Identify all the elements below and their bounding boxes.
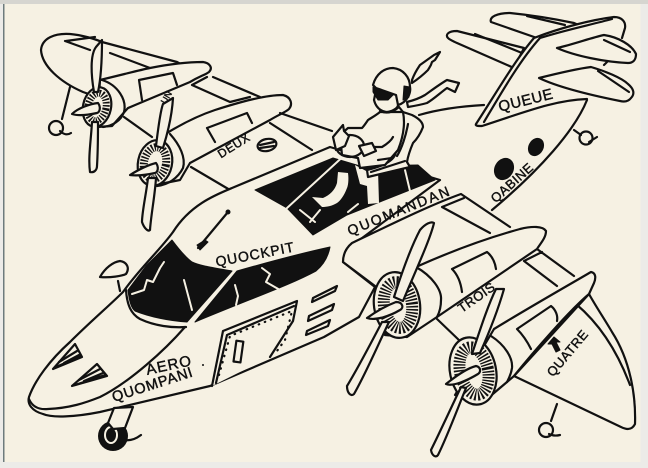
fuselage body (29, 147, 440, 416)
outer wing panel (524, 249, 574, 286)
fin (476, 17, 625, 126)
label QUATRE: QUATRE (544, 327, 591, 379)
propeller one (92, 40, 102, 92)
cockpit floor (255, 158, 435, 235)
engine front four (443, 333, 503, 409)
pitot line (197, 210, 230, 250)
wing surface (343, 194, 510, 290)
stick (287, 152, 348, 208)
left front wing with engine two (130, 95, 332, 231)
nacelle one (97, 62, 211, 127)
scarves (412, 52, 440, 83)
label CABINE: QABINE (488, 160, 536, 206)
nose inner line (29, 327, 185, 409)
side vents (306, 286, 337, 335)
right wing with engine three (347, 222, 574, 395)
portholes (491, 155, 517, 183)
label UN: UN (159, 89, 174, 106)
nose window frame (126, 290, 186, 327)
label DEUX: DEUX (215, 130, 253, 161)
propeller two (156, 98, 173, 148)
fuselage (29, 147, 440, 416)
ear flap (403, 86, 410, 100)
Q float tail (574, 130, 581, 135)
goggles (373, 87, 393, 100)
dot of the label (202, 364, 204, 366)
cockpit opening with pilot (255, 52, 459, 235)
helmet (373, 68, 410, 105)
rear fuselage (400, 100, 587, 240)
mirror (100, 261, 128, 291)
label TROIS: TROIS (455, 279, 498, 316)
right wing with engine four (431, 272, 635, 456)
label QUOCKPIT: QUOCKPIT (214, 239, 296, 270)
propeller three (394, 222, 434, 301)
engine front two (134, 137, 176, 189)
label QUEUE: QUEUE (497, 86, 555, 116)
middle wing panel (124, 77, 260, 137)
windscreen right (195, 247, 330, 322)
upper left tailplane (491, 13, 590, 38)
windscreen left (128, 240, 232, 322)
lower right tailplane (539, 67, 633, 102)
body (340, 112, 404, 168)
tail unit (400, 13, 636, 240)
upper right tailplane (557, 35, 636, 63)
Q float four (551, 404, 557, 421)
label QUOMANDAN: QUOMANDAN (345, 182, 453, 238)
gloves (333, 125, 349, 150)
left rear wing with engine one (41, 34, 260, 172)
wing tip (41, 34, 200, 108)
right front wing (343, 182, 510, 290)
wing leading edge (343, 194, 510, 286)
engine front three (370, 269, 424, 341)
lower left tailplane (447, 31, 524, 68)
engine front one (79, 85, 115, 129)
nose gear (98, 407, 141, 451)
filler cap (256, 137, 278, 153)
leg (312, 172, 348, 207)
nacelle two (150, 95, 291, 186)
nose vents (53, 344, 107, 386)
door (212, 301, 297, 386)
wing panel rear of engine two (191, 113, 332, 190)
head (374, 90, 400, 112)
nacelle four (455, 272, 595, 404)
slat line (442, 198, 490, 233)
seat (367, 112, 423, 177)
propeller four (472, 289, 504, 354)
label QUOMPANI: QUOMPANI (110, 365, 195, 406)
wing tip four (514, 294, 635, 429)
wing line between engines (437, 319, 461, 342)
steering wheel (336, 135, 364, 157)
nacelle three (385, 227, 546, 337)
thigh and seat post (355, 165, 379, 204)
label AERO: AERO (145, 352, 194, 379)
Q float one (62, 87, 70, 119)
arrow marking (548, 337, 560, 352)
